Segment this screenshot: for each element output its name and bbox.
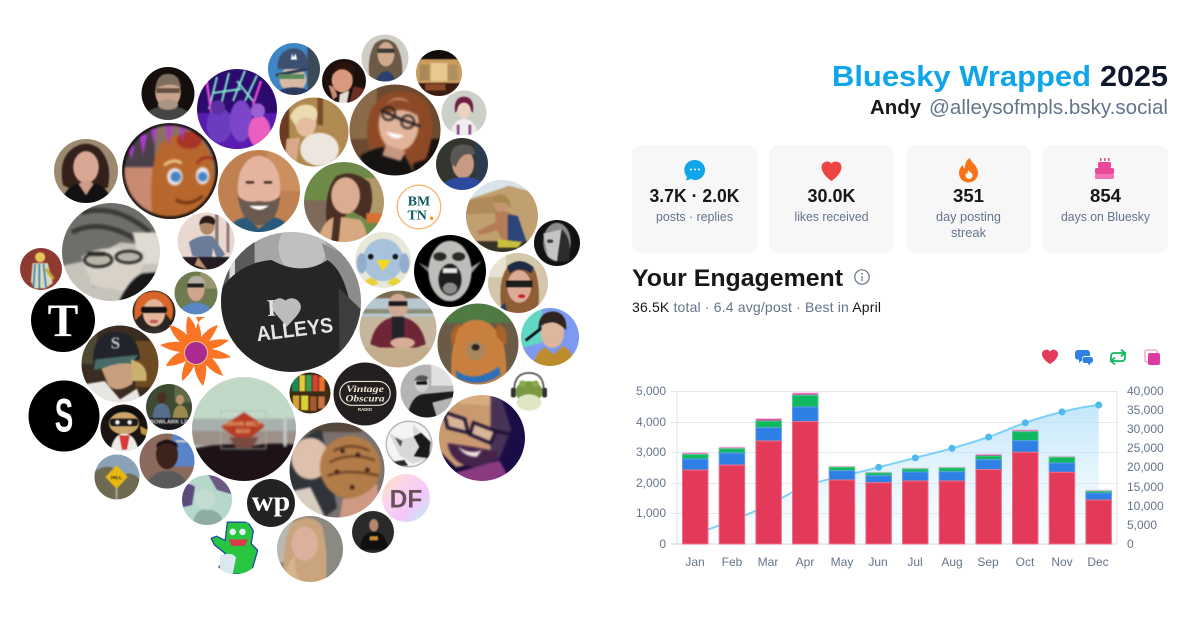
- cumulative line markers: [838, 402, 1102, 480]
- chart left axis labels: [636, 384, 666, 551]
- chart legend icons: [1042, 350, 1160, 366]
- chart right axis labels: 5,000: [1127, 518, 1157, 532]
- chart month labels: May: [831, 555, 853, 569]
- avatar: person in navy M cap: [268, 43, 320, 95]
- avatar: Grain Belt Beer sign at dusk: BEER: [236, 429, 250, 435]
- avatar: Bowlark stage photo: [146, 384, 192, 430]
- title: Bluesky Wrapped: [832, 61, 1091, 93]
- chart right axis labels: 30,000: [1127, 422, 1164, 436]
- chart month labels: Jun: [868, 555, 888, 569]
- chart right axis labels: 20,000: [1127, 460, 1164, 474]
- icon: orange sun with purple centre: [160, 316, 231, 386]
- avatar: black and white man's face: [534, 220, 580, 266]
- avatar: bald bearded man smiling: [218, 150, 300, 232]
- avatar: man in Mariners cap: S: [111, 334, 120, 353]
- chart left axis labels: 2,000: [636, 476, 666, 490]
- chart left axis labels: 3,000: [636, 445, 666, 459]
- avatar: woman on sandy rocks: [466, 180, 538, 252]
- avatar: Vintage Obscura Radio logo: Obscura: [345, 395, 385, 405]
- chart right axis labels: 40,000: [1127, 384, 1164, 398]
- chart month labels: Jan: [685, 555, 705, 569]
- avatar: cat sketch black and white: [386, 420, 432, 468]
- avatar: man with blue shirt and glasses: [174, 272, 218, 314]
- icon: chat bubble: [684, 160, 705, 180]
- chart month labels: Sep: [977, 555, 999, 569]
- chart month labels: Oct: [1016, 555, 1035, 569]
- cumulative area: [695, 405, 1099, 544]
- avatar: illustrated dark-haired boy: [521, 308, 579, 366]
- chart month labels: Jul: [907, 555, 923, 569]
- avatar: black circle with S logo: [28, 380, 100, 452]
- engagement summary: 36.5K total · 6.4 avg/post · Best in April: [632, 299, 881, 315]
- panel: posts and replies: 3.7K · 2.0K: [650, 186, 740, 206]
- avatar: pale teal baby photo: [182, 475, 232, 525]
- chart right axis labels: 0: [1127, 537, 1134, 551]
- avatar: man with glasses on dark background: [142, 67, 194, 120]
- avatar: big photo, I heart Alleys shirt: ALLEYS: [255, 314, 334, 346]
- avatar: woman with long blonde hair: [277, 516, 343, 582]
- panel: days on Bluesky: days on Bluesky: [1061, 209, 1150, 224]
- panel: likes received: likes received: [794, 209, 868, 224]
- user name and handle: Andy: [870, 97, 922, 119]
- panel: day posting streak: day posting: [936, 209, 1001, 224]
- avatar: Hamburglar plush: [100, 404, 148, 452]
- avatar: Vintage Obscura Radio logo: [334, 362, 396, 426]
- avatar: man sitting by window: [178, 212, 234, 270]
- icon: legend replies: [1075, 350, 1093, 366]
- avatar: yellow diamond road sign: HILL: [111, 475, 122, 481]
- chart month labels: Apr: [796, 555, 814, 569]
- avatar: small yellow knitted figure: [20, 248, 62, 290]
- avatar bubble cluster: [18, 32, 582, 585]
- panel: posts and replies: [632, 145, 757, 253]
- avatar: New York Times T logo: T: [48, 295, 79, 346]
- avatar: DF on pastel gradient: [382, 474, 430, 522]
- chart month labels: Mar: [758, 555, 778, 569]
- avatar: gingerbread cartoon face with black ring: [122, 123, 218, 219]
- avatar: neon-lit group photo: [197, 69, 277, 149]
- avatar: green pixel dinosaur: [210, 522, 258, 574]
- avatar: illustrated man with hand on cheek: [322, 59, 366, 103]
- avatar: BMTN logo: [396, 184, 442, 230]
- panel: days on Bluesky: 854: [1090, 186, 1121, 206]
- chart left axis labels: 0: [659, 537, 666, 551]
- avatar: person with long hair and glasses: [362, 34, 408, 82]
- chart right axis labels: 10,000: [1127, 499, 1164, 513]
- avatar: golden dog with blue collar: [438, 304, 518, 384]
- avatar: curly-haired woman: [54, 139, 118, 203]
- chart month labels: Aug: [941, 555, 963, 569]
- chart: monthly engagement stacked bars with cumulative line: [636, 384, 1164, 569]
- chart month labels: Nov: [1051, 555, 1073, 569]
- avatar: girl with maroon hair: [442, 90, 486, 136]
- panel: likes received: [769, 145, 894, 253]
- icon: red heart: [822, 162, 842, 181]
- panel: day posting streak: 351: [953, 186, 984, 206]
- title: 2025: [1100, 61, 1168, 93]
- panel: day posting streak: [906, 145, 1031, 253]
- chart month labels: Dec: [1087, 555, 1109, 569]
- icon: legend quotes: [1145, 350, 1160, 365]
- panel: likes received: 30.0K: [808, 186, 856, 206]
- avatar: man in gray hoodie: [140, 434, 194, 488]
- avatar: man with dark glasses, purple tint: [439, 395, 525, 481]
- icon: legend reposts: [1111, 350, 1125, 364]
- icon: legend heart: [1042, 350, 1058, 364]
- chart gridlines: [671, 391, 1117, 544]
- avatar: man in red jacket at outdoor table: [360, 290, 436, 368]
- avatar: brunette woman at cafe: [304, 162, 384, 242]
- user name and handle: @alleysofmpls.bsky.social: [929, 97, 1168, 119]
- avatar: big photo, I heart Alleys shirt: [221, 232, 361, 372]
- chart left axis labels: 1,000: [636, 506, 666, 520]
- avatar: Bowlark stage photo: BOWLARK LD: [150, 420, 189, 426]
- cumulative line: [695, 405, 1099, 533]
- chart left axis labels: 5,000: [636, 384, 666, 398]
- chart right axis labels: 25,000: [1127, 441, 1164, 455]
- avatar: black circle with S logo: S: [55, 390, 73, 442]
- avatar: black and white man in sunglasses: [400, 364, 454, 418]
- avatar: BMTN logo: BM: [408, 195, 430, 210]
- avatar: snacks shelf: [290, 372, 330, 414]
- avatar: yellow diamond road sign: [94, 454, 140, 500]
- chart month labels: Feb: [722, 555, 743, 569]
- stacked bars: [682, 393, 1111, 544]
- icon: birthday cake: [1095, 158, 1114, 179]
- panel: posts and replies: posts · replies: [656, 209, 733, 224]
- chart month labels: [685, 555, 1109, 569]
- avatar: BMTN logo: TN: [408, 209, 427, 224]
- chart left axis labels: 4,000: [636, 415, 666, 429]
- avatar: grayscale woman with round glasses: [62, 203, 160, 301]
- chart right axis labels: [1127, 384, 1164, 551]
- avatar: Washington Post wp logo: [247, 479, 295, 527]
- avatar: vintage radio console: [416, 50, 462, 96]
- avatar: frog wearing headphones: [510, 371, 548, 411]
- avatar: Vintage Obscura Radio logo: RADIO: [358, 407, 373, 412]
- avatar: woman with glasses and red lips: [488, 253, 548, 313]
- avatar: crocheted blue bird: [355, 232, 411, 288]
- icon: flame: [959, 158, 978, 182]
- avatar: DF on pastel gradient: DF: [390, 486, 422, 514]
- avatar: woman holding round bread loaf: [290, 422, 384, 518]
- avatar: Grain Belt Beer sign at dusk: GRAIN BELT: [225, 421, 261, 428]
- avatar: man in Mariners cap: [82, 326, 158, 402]
- avatar: Washington Post wp logo: wp: [252, 486, 290, 518]
- heading: Your Engagement: Your Engagement: [632, 265, 843, 292]
- chart right axis labels: 35,000: [1127, 403, 1164, 417]
- avatar: man in black tee, dark background: [352, 511, 394, 553]
- avatar: Vintage Obscura Radio logo: Vintage: [346, 385, 384, 395]
- avatar: big photo, I heart Alleys shirt: I: [266, 296, 277, 322]
- avatar: smiling woman in glasses: [350, 84, 440, 176]
- avatar: blonde woman with drink: [280, 98, 348, 166]
- panel: days on Bluesky: [1043, 145, 1168, 253]
- avatar: man in blue shirt looking aside: [436, 138, 488, 190]
- avatar: woman with orange hair and black glasses: [132, 290, 176, 334]
- avatar: Grain Belt Beer sign at dusk: [192, 377, 296, 481]
- avatar: screaming vampire face: [414, 235, 486, 307]
- avatar: New York Times T logo: [31, 288, 95, 352]
- panel: day posting streak: streak: [951, 225, 986, 240]
- chart right axis labels: 15,000: [1127, 480, 1164, 494]
- icon: info: [855, 270, 869, 284]
